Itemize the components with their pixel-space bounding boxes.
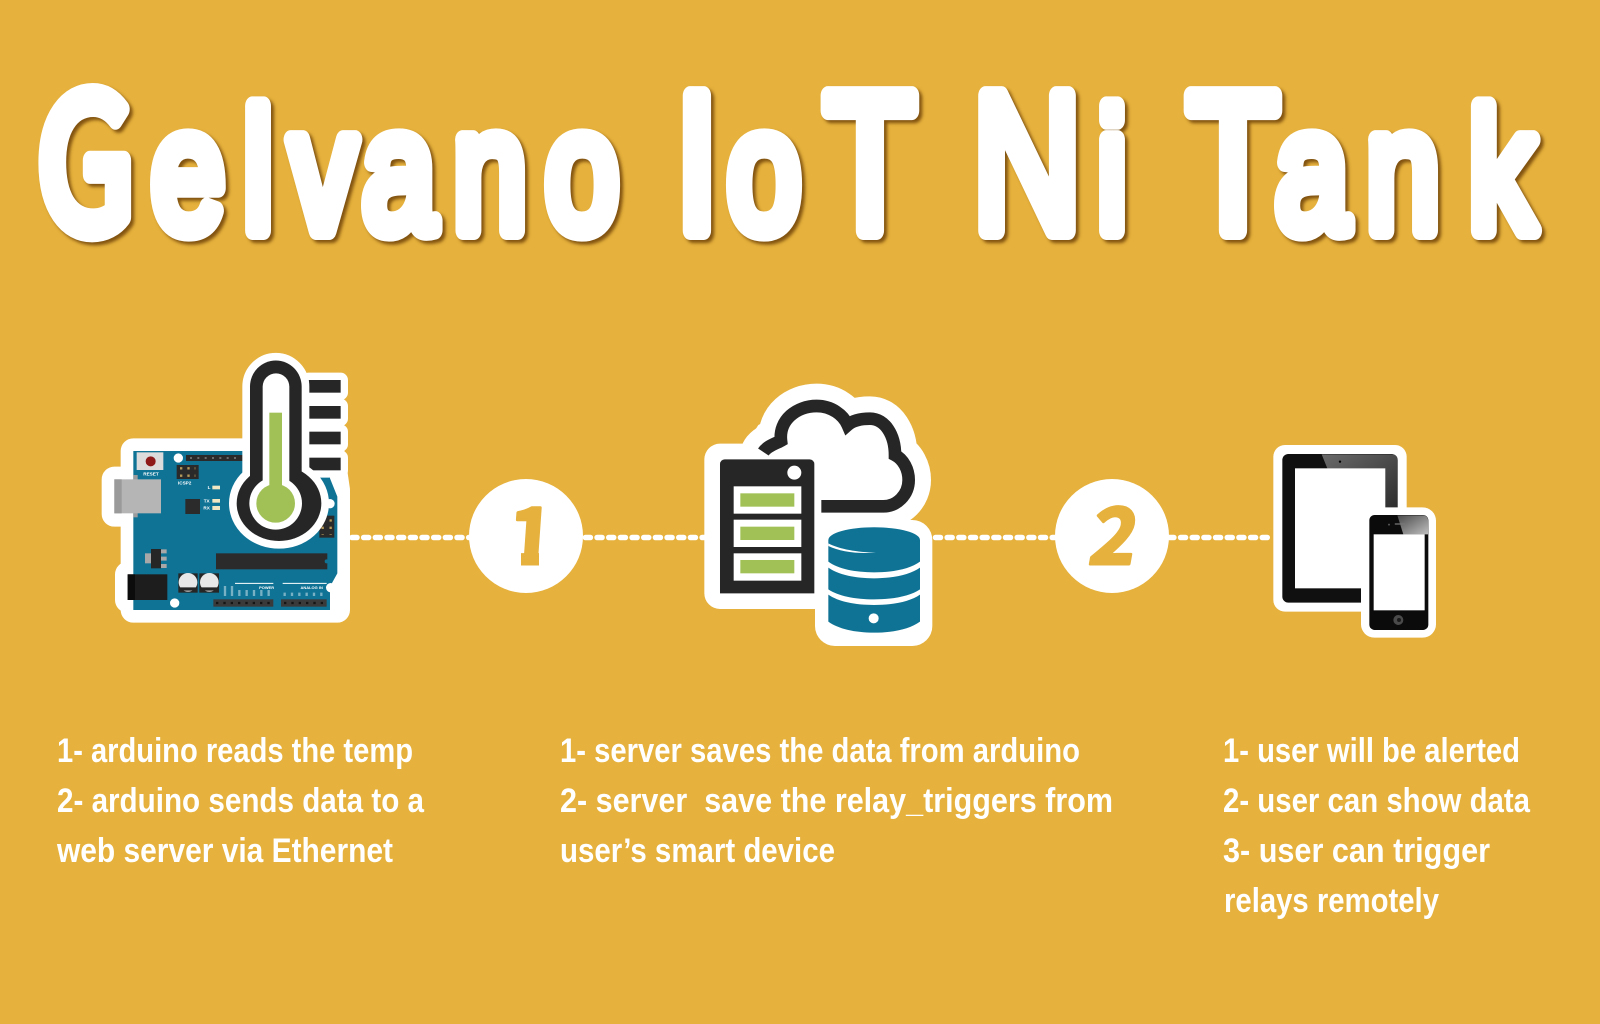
title: o	[728, 76, 800, 268]
icon: server, cloud and database	[720, 406, 932, 646]
step 1 badge: 1	[504, 474, 558, 587]
arduino board	[114, 451, 337, 610]
title: G	[37, 17, 134, 285]
title: I	[676, 53, 718, 272]
title: T	[1188, 53, 1279, 272]
title	[37, 17, 1535, 285]
text block: arduino steps: 2- arduino sends data to a	[57, 782, 425, 820]
text block: server steps: user’s smart device	[560, 832, 835, 870]
arduino board: ICSP2	[178, 480, 192, 485]
arduino board: RESET	[143, 471, 159, 476]
text block: arduino steps: 1- arduino reads the temp	[57, 732, 413, 770]
icon: arduino board with thermometer	[114, 360, 341, 610]
text block: user steps: 3- user can trigger	[1223, 832, 1490, 870]
thermometer	[237, 360, 321, 541]
white sticker outline	[720, 406, 932, 646]
database	[828, 527, 920, 633]
title: elvano	[152, 76, 664, 268]
text block: arduino steps	[56, 732, 425, 870]
arduino board: POWER	[259, 585, 274, 590]
text block: user steps	[1223, 732, 1531, 920]
text block: server steps: 1- server saves the data from arduino	[560, 732, 1080, 770]
server	[720, 459, 814, 593]
step 2 badge	[1055, 474, 1169, 593]
arduino board: L	[208, 485, 211, 490]
title: ank	[1276, 76, 1535, 268]
arduino board: ANALOG IN	[300, 585, 323, 590]
title: T	[824, 53, 971, 272]
white sticker outline	[114, 451, 337, 610]
step 2 badge: 2	[1083, 474, 1149, 587]
text block: server steps: 2- server save the relay_triggers from	[560, 782, 1113, 820]
arduino board: RX	[203, 506, 211, 511]
text block: arduino steps: web server via Ethernet	[56, 832, 393, 870]
title: N	[973, 53, 1081, 272]
step 1 badge	[469, 474, 583, 593]
dotted connector line	[352, 535, 1272, 540]
arduino board: TX	[204, 498, 211, 503]
thermometer bars	[309, 380, 341, 470]
title: i	[1098, 76, 1189, 268]
phone	[1361, 507, 1436, 638]
tablet	[1273, 445, 1407, 612]
cloud	[763, 406, 909, 506]
text block: server steps	[560, 732, 1113, 870]
text block: user steps: relays remotely	[1224, 882, 1439, 920]
icon: tablet and phone	[1273, 445, 1436, 638]
text block: user steps: 1- user will be alerted	[1223, 732, 1520, 770]
text block: user steps: 2- user can show data	[1223, 782, 1531, 820]
